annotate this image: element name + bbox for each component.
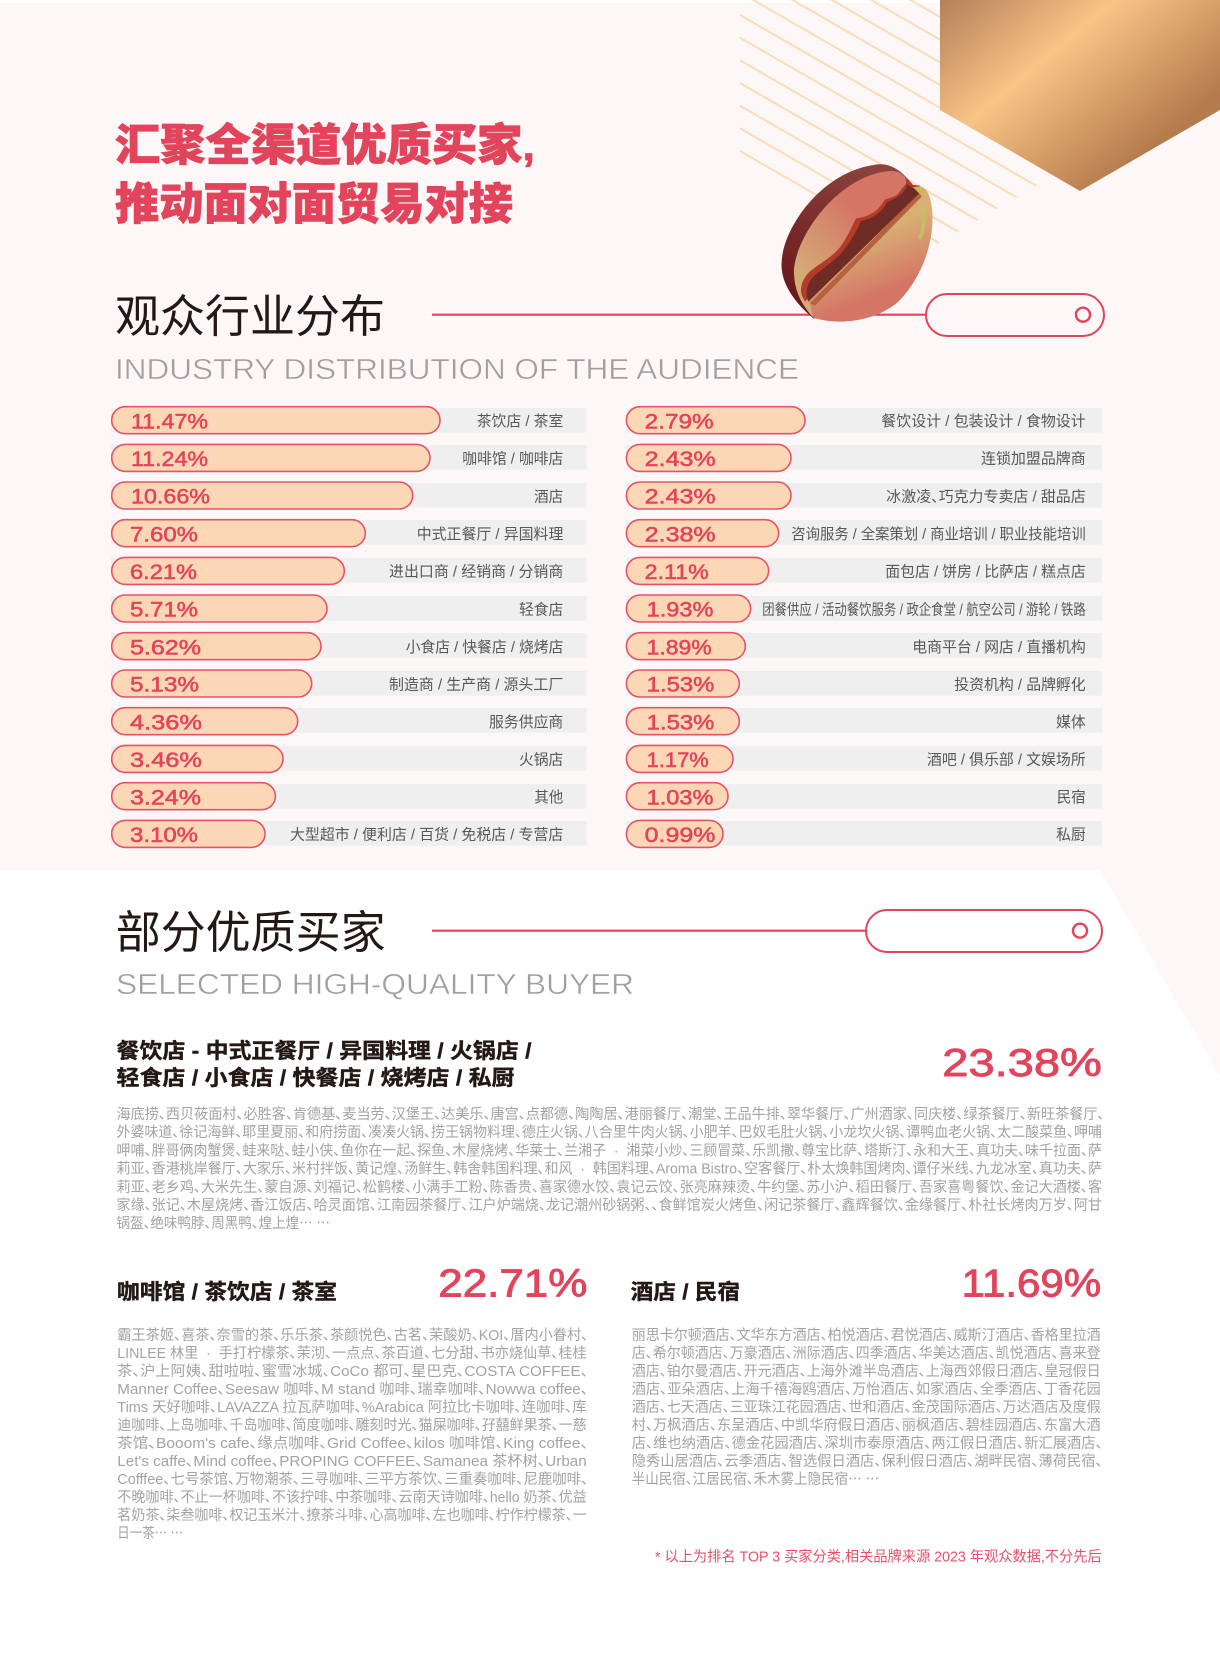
bar: 小食店 / 快餐店 / 烧烤店 xyxy=(111,633,587,660)
bar: 电商平台 / 网店 / 直播机构 xyxy=(626,633,1102,660)
bar: 茶饮店 / 茶室: 11.47% xyxy=(131,410,208,433)
bar: 服务供应商 xyxy=(111,708,587,735)
bar: 茶饮店 / 茶室 xyxy=(111,407,587,434)
brand list: 锅盔、绝味鸭脖、周黑鸭、煌上煌⋯ ⋯ xyxy=(116,1215,330,1232)
section heading: audience distribution: 观众行业分布 xyxy=(115,291,385,342)
bar: 媒体: 1.53% xyxy=(647,711,714,734)
brand list: 酒店、亚朵酒店、上海千禧海鸥酒店、万怡酒店、如家酒店、全季酒店、丁香花园 xyxy=(632,1380,1101,1398)
bar: 中式正餐厅 / 异国料理: 中式正餐厅 / 异国料理 xyxy=(417,526,563,543)
bar: 面包店 / 饼房 / 比萨店 / 糕点店: 2.11% xyxy=(645,561,709,584)
bar: 餐饮设计 / 包装设计 / 食物设计: 餐饮设计 / 包装设计 / 食物设计 xyxy=(881,413,1086,430)
brand list: 店、维也纳酒店、德金花园酒店、深圳市泰原酒店、两江假日酒店、新汇展酒店、 xyxy=(632,1435,1103,1452)
bar: 茶饮店 / 茶室: 茶饮店 / 茶室 xyxy=(477,413,563,430)
bar: 民宿: 1.03% xyxy=(647,786,713,809)
group heading: 餐饮店 - 中式正餐厅 / 异国料理 / 火锅店 / xyxy=(116,1040,532,1063)
bar: 制造商 / 生产商 / 源头工厂 xyxy=(111,670,587,697)
bar: 服务供应商: 4.36% xyxy=(130,711,202,734)
bar: 中式正餐厅 / 异国料理: 7.60% xyxy=(130,523,198,546)
brand list xyxy=(632,1327,1103,1488)
section heading: selected buyers: SELECTED HIGH-QUALITY BUYER xyxy=(116,969,634,1001)
brand list: 不晚咖啡、不止一杯咖啡、不该拧啡、中茶咖啡、云南天诗咖啡、hello 奶茶、优益 xyxy=(117,1489,587,1506)
bar: 轻食店: 5.71% xyxy=(130,599,198,622)
bar: 酒店: 10.66% xyxy=(131,486,210,509)
bar: 私厨: 0.99% xyxy=(645,824,715,847)
bar: 咖啡馆 / 咖啡店: 咖啡馆 / 咖啡店 xyxy=(462,451,563,468)
bar: 冰激凌、巧克力专卖店 / 甜品店: 2.43% xyxy=(645,486,716,509)
bar: 咨询服务 / 全案策划 / 商业培训 / 职业技能培训: 咨询服务 / 全案策划 / 商业培训 / 职业技能培训 xyxy=(791,525,1086,543)
brand list xyxy=(117,1327,588,1542)
buyer group: hotels and homestays xyxy=(631,1263,1103,1488)
bar: 连锁加盟品牌商 xyxy=(626,444,1102,471)
brand list: Tims 天好咖啡、LAVAZZA 拉瓦萨咖啡、%Arabica 阿拉比卡咖啡、连咖啡、库 xyxy=(117,1399,587,1416)
bar: 团餐供应 / 活动餐饮服务 / 政企食堂 / 航空公司 / 游轮 / 铁路: 团餐供应 / 活动餐饮服务 / 政企食堂 / 航空公司 / 游轮 / 铁路 xyxy=(762,600,1086,618)
bar: 咨询服务 / 全案策划 / 商业培训 / 职业技能培训: 2.38% xyxy=(645,523,716,546)
bar: 餐饮设计 / 包装设计 / 食物设计: 2.79% xyxy=(645,410,714,433)
bar: 酒吧 / 俱乐部 / 文娱场所 xyxy=(626,745,1102,772)
brand list: 莉亚、香港桃岸餐厅、大家乐、米村拌饭、黄记煌、汤鲜生、韩舍韩国料理、和风 · 韩国料理、Aroma Bistro、空客餐厅、朴太焕韩国烤肉、谭仔米线、九龙冰室、真功夫、萨 xyxy=(116,1160,1102,1178)
bar chart: left column xyxy=(111,407,587,847)
bar: 其他 xyxy=(111,783,587,810)
bar: 制造商 / 生产商 / 源头工厂: 制造商 / 生产商 / 源头工厂 xyxy=(389,676,563,693)
group heading: 咖啡馆 / 茶饮店 / 茶室 xyxy=(117,1280,337,1304)
main title xyxy=(115,121,535,229)
decorative diagonal stripes xyxy=(740,0,1037,243)
bar: 酒吧 / 俱乐部 / 文娱场所: 1.17% xyxy=(647,749,709,772)
bar: 大型超市 / 便利店 / 百货 / 免税店 / 专营店 xyxy=(111,820,587,847)
brand list: 酒店、铂尔曼酒店、开元酒店、上海外滩半岛酒店、上海西郊假日酒店、皇冠假日 xyxy=(632,1363,1101,1380)
bar: 民宿 xyxy=(626,783,1102,810)
bar: 酒店 xyxy=(111,482,587,509)
bar: 冰激凌、巧克力专卖店 / 甜品店: 冰激凌、巧克力专卖店 / 甜品店 xyxy=(886,488,1086,505)
brand list: 半山民宿、江居民宿、禾木雾上隐民宿⋯ ⋯ xyxy=(632,1471,879,1488)
brand list: 村、万枫酒店、东呈酒店、中凯华府假日酒店、丽枫酒店、碧桂园酒店、东富大酒 xyxy=(632,1416,1101,1434)
bar: 大型超市 / 便利店 / 百货 / 免税店 / 专营店: 大型超市 / 便利店 / 百货 / 免税店 / 专营店 xyxy=(290,827,563,844)
bar: 咖啡馆 / 咖啡店: 11.24% xyxy=(131,448,208,471)
bar: 火锅店 xyxy=(111,745,587,772)
footnote: * 以上为排名 TOP 3 买家分类,相关品牌来源 2023 年观众数据,不分先后 xyxy=(655,1548,1102,1566)
bar: 酒店: 酒店 xyxy=(534,488,563,505)
brand list: LINLEE 林里 · 手打柠檬茶、茉沏、一点点、茶百道、七分甜、书亦烧仙草、桂桂 xyxy=(117,1345,587,1362)
brand list: 外婆味道、徐记海鲜、耶里夏丽、和府捞面、凑凑火锅、捞王锅物料理、德庄火锅、八合里牛肉火锅、小肥羊、巴奴毛肚火锅、小龙坎火锅、谭鸭血老火锅、太二酸菜鱼、呷哺 xyxy=(116,1123,1102,1141)
brand list: Manner Coffee、Seesaw 咖啡、M stand 咖啡、瑞幸咖啡、Nowwa coffee、 xyxy=(117,1381,588,1398)
bar: 连锁加盟品牌商: 连锁加盟品牌商 xyxy=(981,451,1086,468)
section heading: audience distribution: INDUSTRY DISTRIBUTION OF THE AUDIENCE xyxy=(115,354,799,386)
bar: 媒体 xyxy=(626,708,1102,735)
brand list: 莉亚、老乡鸡、大米先生、蒙自源、刘福记、松鹤楼、小满手工粉、陈香贵、喜家德水饺、袁记云饺、张亮麻辣烫、牛约堡、苏小沪、稻田餐厅、吾家喜粤餐饮、金记大酒楼、客 xyxy=(116,1178,1102,1196)
bar: 民宿: 民宿 xyxy=(1057,789,1086,806)
section heading: selected buyers xyxy=(116,907,634,1001)
bar chart: right column xyxy=(626,407,1102,847)
bar: 团餐供应 / 活动餐饮服务 / 政企食堂 / 航空公司 / 游轮 / 铁路: 1.93% xyxy=(647,599,713,622)
brand list: 家缘、张记、木屋烧烤、香江饭店、哈灵面馆、江南园茶餐厅、江户炉端烧、龙记潮州砂锅粥、、食鲜馆炭火烤鱼、闲记茶餐厅、鑫辉餐饮、金缘餐厅、朴社长烤肉万岁、阿甘 xyxy=(116,1196,1102,1214)
bar: 面包店 / 饼房 / 比萨店 / 糕点店: 面包店 / 饼房 / 比萨店 / 糕点店 xyxy=(885,564,1086,581)
bar: 轻食店: 轻食店 xyxy=(519,601,563,618)
bar: 其他: 其他 xyxy=(534,789,563,806)
bar: 小食店 / 快餐店 / 烧烤店: 5.62% xyxy=(130,636,201,659)
bar: 咨询服务 / 全案策划 / 商业培训 / 职业技能培训 xyxy=(626,520,1102,547)
heading connector line and pill xyxy=(432,910,1102,952)
bar: 火锅店: 3.46% xyxy=(130,749,202,772)
brand list: 丽思卡尔顿酒店、文华东方酒店、柏悦酒店、君悦酒店、威斯汀酒店、香格里拉酒 xyxy=(632,1327,1101,1344)
brand list: 隐秀山居酒店、云季酒店、智选假日酒店、保利假日酒店、湖畔民宿、薄荷民宿、 xyxy=(632,1453,1103,1470)
group heading: 轻食店 / 小食店 / 快餐店 / 烧烤店 / 私厨 xyxy=(116,1066,514,1090)
bar: 团餐供应 / 活动餐饮服务 / 政企食堂 / 航空公司 / 游轮 / 铁路 xyxy=(626,595,1102,622)
percentage 11.69%: 11.69% xyxy=(962,1263,1101,1306)
brand list: 日一茶⋯ ⋯ xyxy=(117,1525,183,1542)
brand list xyxy=(116,1106,1104,1232)
main title: 推动面对面贸易对接 xyxy=(115,180,513,229)
bar: 中式正餐厅 / 异国料理 xyxy=(111,520,587,547)
bar: 咖啡馆 / 咖啡店 xyxy=(111,444,587,471)
section heading: selected buyers: 部分优质买家 xyxy=(116,907,386,958)
brand list: 茶馆、Booom's cafe、缘点咖啡、Grid Coffee、kilos 咖啡馆、King coffee、 xyxy=(117,1435,588,1452)
bar: 电商平台 / 网店 / 直播机构: 1.89% xyxy=(647,636,712,659)
brand list: 呷哺、胖哥俩肉蟹煲、蛙来哒、蛙小侠、鱼你在一起、探鱼、木屋烧烤、华莱士、兰湘子 · 湘菜小炒、三顾冒菜、乐凯撒、尊宝比萨、塔斯汀、永和大王、真功夫、味千拉面、萨 xyxy=(116,1141,1102,1159)
bar: 进出口商 / 经销商 / 分销商: 进出口商 / 经销商 / 分销商 xyxy=(389,564,563,581)
bar: 进出口商 / 经销商 / 分销商: 6.21% xyxy=(130,561,197,584)
bar: 制造商 / 生产商 / 源头工厂: 5.13% xyxy=(130,674,199,697)
brand list: 霸王茶姬、喜茶、奈雪的茶、乐乐茶、茶颜悦色、古茗、茉酸奶、KOI、厝内小眷村、 xyxy=(117,1327,588,1344)
icon: coffee bean xyxy=(782,164,932,322)
bar: 私厨: 私厨 xyxy=(1056,827,1086,844)
brand list: 茗奶茶、柒叁咖啡、权记玉米汁、撩茶斗啡、心高咖啡、左也咖啡、柠作柠檬茶、一 xyxy=(117,1506,587,1524)
bar: 进出口商 / 经销商 / 分销商 xyxy=(111,557,587,584)
brand list: 酒店、七天酒店、三亚珠江花园酒店、世和酒店、金茂国际酒店、万达酒店及度假 xyxy=(632,1399,1101,1416)
brand list: 迪咖啡、上岛咖啡、千岛咖啡、简度咖啡、雕刻时光、猫屎咖啡、孖囍鲜果茶、一慈 xyxy=(117,1417,587,1434)
group heading xyxy=(116,1040,532,1090)
bar: 冰激凌、巧克力专卖店 / 甜品店 xyxy=(626,482,1102,509)
bar: 投资机构 / 品牌孵化: 1.53% xyxy=(647,674,714,697)
bar: 其他: 3.24% xyxy=(130,786,201,809)
brand list: 茶、沪上阿姨、甜啦啦、蜜雪冰城、CoCo 都可、星巴克、COSTA COFFEE、 xyxy=(117,1363,588,1380)
background: pink corner triangle xyxy=(1100,870,1220,1076)
brand list: 海底捞、西贝莜面村、必胜客、肯德基、麦当劳、汉堡王、达美乐、唐宫、点都德、陶陶居、港丽餐厅、潮堂、王品牛排、翠华餐厅、广州酒家、同庆楼、绿茶餐厅、新旺茶餐厅、 xyxy=(116,1106,1104,1123)
bar: 餐饮设计 / 包装设计 / 食物设计 xyxy=(626,407,1102,434)
page background: pink upper area xyxy=(0,3,1220,870)
main title: 汇聚全渠道优质买家, xyxy=(115,121,535,170)
bar: 服务供应商: 服务供应商 xyxy=(489,713,563,731)
brand list: Cofffee、七号茶馆、万物潮茶、三寻咖啡、三平方茶饮、三重奏咖啡、尼鹿咖啡、 xyxy=(117,1471,588,1488)
brand list: Let's caffe、Mind coffee、PROPING COFFEE、Samanea 茶杯树、Urban xyxy=(117,1453,587,1470)
bar: 媒体: 媒体 xyxy=(1056,714,1086,731)
bar: 轻食店 xyxy=(111,595,587,622)
buyer group: restaurants xyxy=(116,1040,1104,1232)
bar: 大型超市 / 便利店 / 百货 / 免税店 / 专营店: 3.10% xyxy=(130,824,198,847)
brand list: 店、希尔顿酒店、万豪酒店、洲际酒店、四季酒店、华美达酒店、凯悦酒店、喜来登 xyxy=(632,1345,1101,1362)
group heading: 酒店 / 民宿 xyxy=(631,1280,740,1304)
percentage 22.71%: 22.71% xyxy=(438,1263,587,1306)
bar: 投资机构 / 品牌孵化: 投资机构 / 品牌孵化 xyxy=(954,676,1086,693)
bar: 火锅店: 火锅店 xyxy=(519,752,563,769)
bar: 酒吧 / 俱乐部 / 文娱场所: 酒吧 / 俱乐部 / 文娱场所 xyxy=(927,752,1086,769)
bar: 小食店 / 快餐店 / 烧烤店: 小食店 / 快餐店 / 烧烤店 xyxy=(406,639,563,656)
bar: 投资机构 / 品牌孵化 xyxy=(626,670,1102,697)
section heading: audience distribution xyxy=(115,291,799,386)
bar: 私厨 xyxy=(626,820,1102,847)
gold hexagon banner xyxy=(940,0,1220,191)
heading connector line and pill xyxy=(432,294,1104,336)
bar: 面包店 / 饼房 / 比萨店 / 糕点店 xyxy=(626,557,1102,584)
bar: 电商平台 / 网店 / 直播机构: 电商平台 / 网店 / 直播机构 xyxy=(912,639,1086,656)
buyer group: cafes and tea houses xyxy=(117,1263,588,1542)
bar: 连锁加盟品牌商: 2.43% xyxy=(645,448,716,471)
percentage 23.38%: 23.38% xyxy=(942,1042,1102,1085)
